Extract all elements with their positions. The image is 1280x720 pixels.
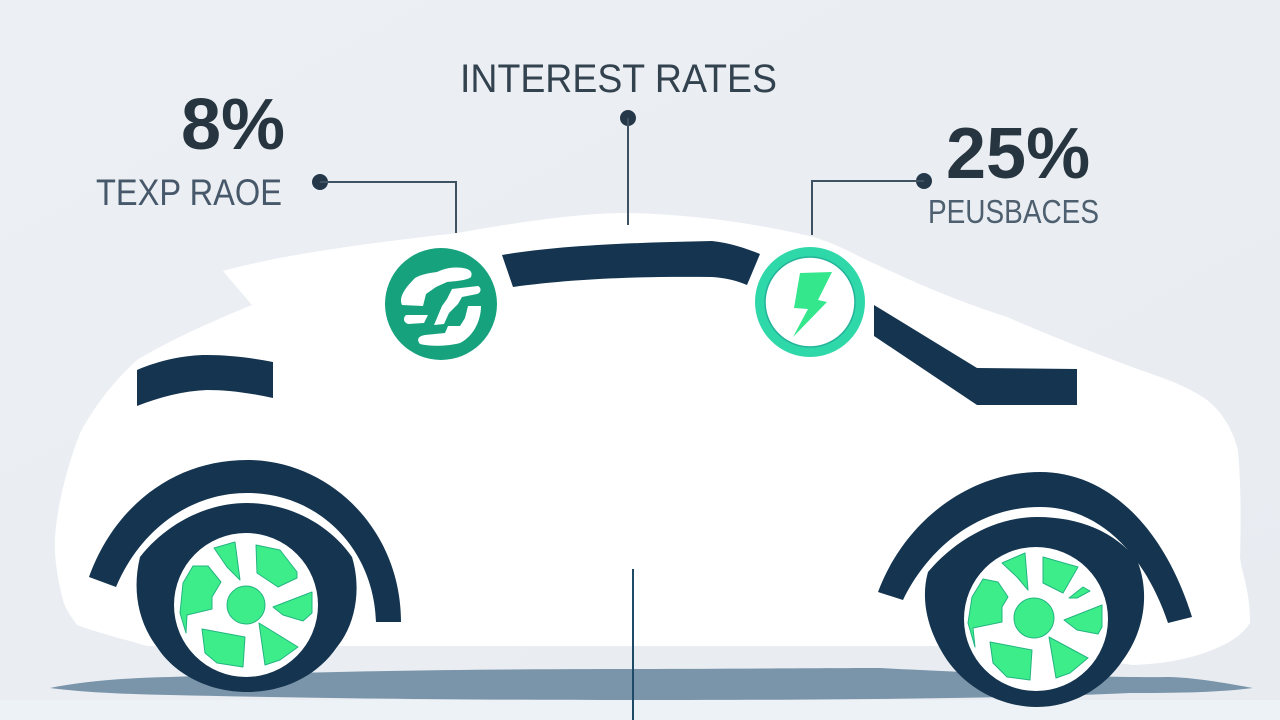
ground shadow (50, 668, 1253, 700)
window: roof (502, 241, 760, 287)
car body (55, 213, 1250, 665)
window: front (874, 305, 1077, 405)
front rim (964, 547, 1108, 691)
rear spokes (180, 542, 312, 667)
car windows (137, 241, 1077, 406)
icon: lightning bolt badge (760, 252, 860, 352)
heading: interest rates: INTEREST RATES (460, 57, 777, 101)
connector: center callout (620, 110, 636, 225)
front fender arch (878, 472, 1192, 623)
rear rim (174, 533, 318, 677)
rear tire (137, 503, 357, 692)
front spokes (968, 553, 1102, 680)
connector: bottom line (632, 569, 634, 720)
window: rear (137, 355, 273, 406)
icon: finance badge (385, 248, 497, 360)
rear wheel (89, 460, 401, 692)
label: left stat: TEXP RAOE (96, 172, 282, 213)
front tire (925, 517, 1144, 707)
label: right stat: PEUSBACES (928, 193, 1099, 230)
stat: 25%: 25% (946, 114, 1090, 194)
connector: left callout (312, 174, 456, 233)
stat: 8%: 8% (181, 85, 285, 165)
front wheel (878, 472, 1192, 707)
connector: right callout (812, 173, 932, 235)
rear fender arch (89, 460, 401, 622)
